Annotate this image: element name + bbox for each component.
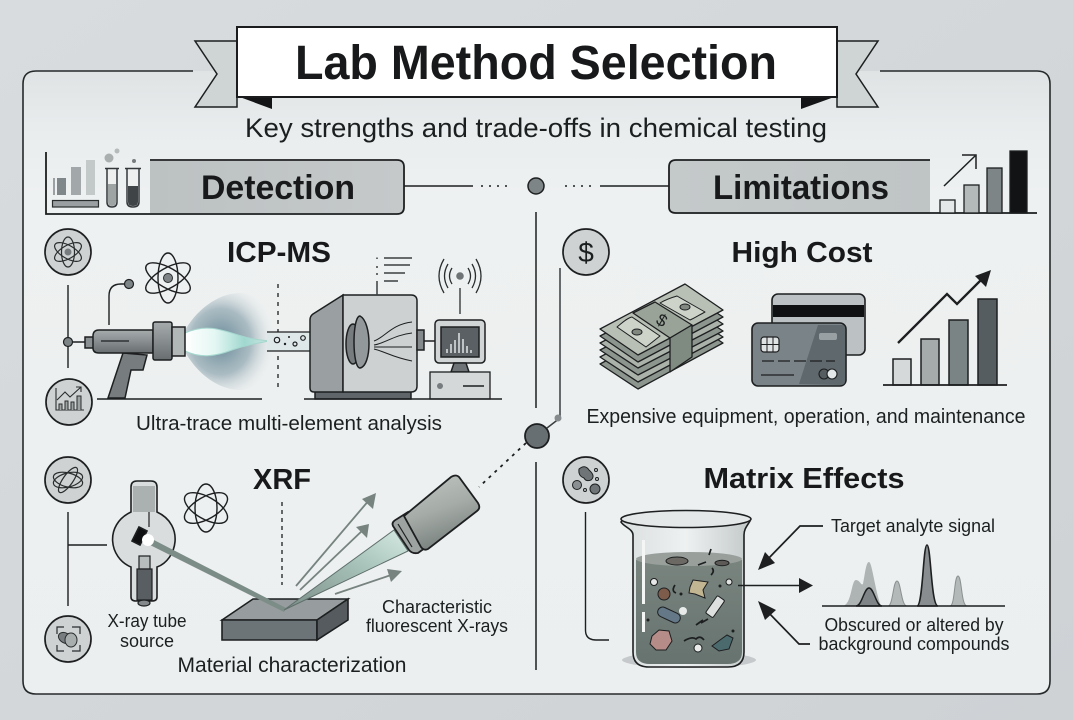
banner body [237,27,837,97]
label: fluorescent X-rays: fluorescent X-rays [366,616,508,636]
ion tube [267,332,351,351]
label: obscured or altered [818,614,1010,654]
liquid surface [636,552,742,566]
beaker [621,510,756,668]
icon: rising cost chart [883,270,1007,385]
plume [185,293,274,390]
label: target analyte signal: Target analyte signal [831,515,995,536]
liquid [636,560,742,664]
rail node [64,338,72,346]
dashed axis [281,502,283,585]
label: X-ray tube source [108,611,186,651]
X-ray tube [113,481,175,606]
heading: XRF: XRF [253,464,311,496]
subtitle: Key strengths and trade-offs in chemical testing [245,113,827,143]
left ribbon tail [195,41,237,107]
caption: Expensive equipment, operation, and maintenance [586,406,1026,428]
icon: atom badge [45,457,91,503]
header: Detection [46,148,404,214]
label: obscured or altered: Obscured or altered by [824,614,1004,635]
emitted ray 1 [296,493,376,586]
right ribbon tail [837,41,878,107]
ground lines [97,398,502,400]
connector: icon rail [68,512,107,606]
label: fluorescent X-rays [366,597,508,636]
icon: atom [141,253,195,303]
sample block [222,599,348,640]
monitor [430,320,490,399]
header: Limitations [669,151,1037,214]
icon: dollar badge: $ [578,237,594,268]
arrow: target signal [758,526,823,570]
header label: Limitations [713,169,889,207]
icon: money stack: $ [653,310,671,331]
beaker glass [621,514,750,667]
dashed axis [277,284,279,390]
label: X-ray tube source: X-ray tube [108,611,186,631]
connector [586,512,609,640]
label: fluorescent X-rays: Characteristic [382,597,492,617]
arrow: background compounds [758,601,810,644]
icon: small bars [52,148,136,207]
header fill [150,161,403,213]
section: ICP-MS [45,229,502,435]
section: Matrix Effects [563,457,1010,668]
icon: atom [180,484,232,532]
fluorescent cone [284,530,408,610]
dividers and central node [479,212,562,670]
header frame [669,160,1037,213]
label: X-ray tube source: source [120,631,174,651]
connector: headers and center node [404,178,669,194]
icon: atom badge [45,229,91,275]
icon: credit cards [752,294,865,386]
emitted ray 3 [335,569,402,594]
section: XRF [45,457,508,677]
contaminants [647,549,734,652]
flame [185,328,270,356]
detector [392,476,479,553]
rim [621,510,751,528]
connector: icon rail [68,285,85,368]
heading: ICP-MS: ICP-MS [227,237,331,269]
header fill [669,160,930,214]
left fold [237,96,272,109]
heading: Matrix Effects: Matrix Effects [704,463,904,495]
highlight [642,540,645,632]
beaker shadow [622,652,756,668]
arrow: to spectrum [738,578,813,593]
icon: dollar badge [563,229,609,275]
wire to torch [109,284,126,325]
header label: Detection [201,169,355,207]
emitted ray 2 [300,524,369,590]
caption: Material characterization [178,654,406,677]
icon: particles badge [563,457,609,503]
spectrum peaks [822,545,1005,606]
icon: sample badge [45,616,91,662]
icon: money stack [600,284,723,389]
icon: chart badge [46,379,92,425]
heading: High Cost: High Cost [732,237,873,269]
title banner [195,27,878,109]
header frame [46,152,404,214]
icon: rising bars [940,151,1027,213]
beam highlight [142,534,154,546]
section: High Cost [563,229,1026,428]
wire node [124,280,134,288]
title: Lab Method Selection [295,37,777,90]
primary beam [148,538,286,612]
mass spectrometer [310,295,435,399]
label: obscured or altered: background compounds [818,633,1010,654]
icon: test tubes [105,168,141,207]
caption: Ultra-trace multi-element analysis [136,413,442,435]
wireless signal [439,259,481,314]
torch [85,322,185,398]
right fold [801,96,837,109]
data list [377,258,412,295]
